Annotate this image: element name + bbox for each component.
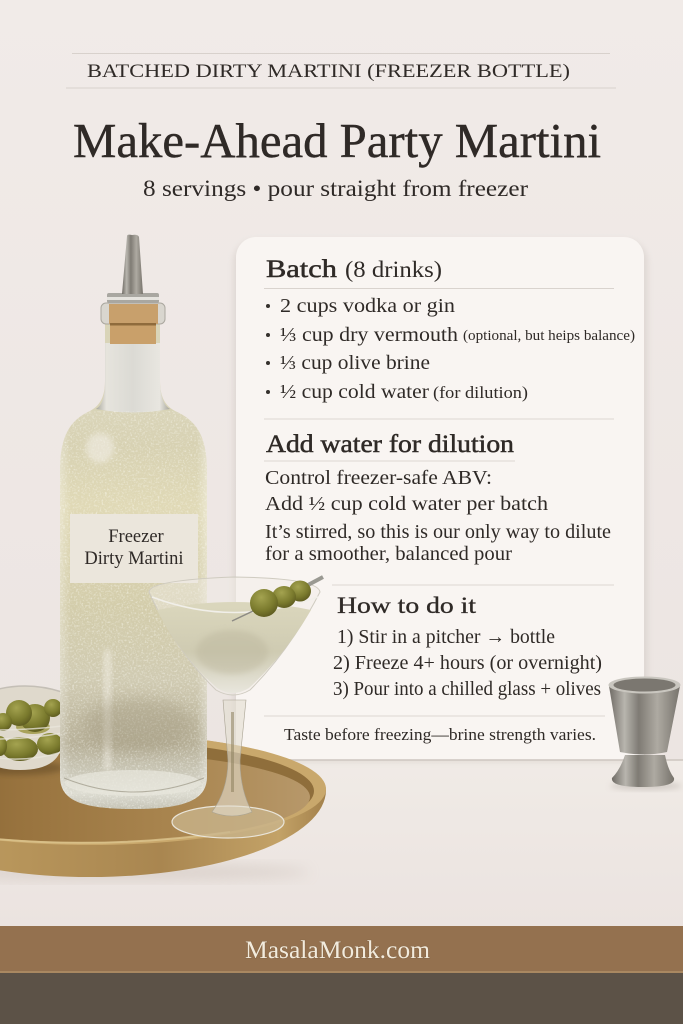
steps: 2) Freeze 4+ hours (or overnight) (333, 652, 602, 674)
footer band (0, 926, 683, 973)
batch heading: (8 drinks) (345, 257, 442, 282)
steps: 3) Pour into a chilled glass + olives (333, 678, 601, 700)
water body text: Control freezer-safe ABV: (265, 467, 492, 489)
frost highlights (60, 405, 207, 809)
water heading: Add water for dilution (266, 429, 514, 458)
how to heading: How to do it (337, 593, 477, 618)
wall-counter edge shadow (0, 759, 683, 761)
site name: MasalaMonk.com (245, 937, 431, 964)
water body text: Add ½ cup cold water per batch (265, 493, 548, 515)
batch heading (266, 254, 442, 283)
icon: steel jigger (608, 676, 682, 790)
steps (333, 626, 602, 700)
icon: freezer bottle (60, 235, 207, 809)
water body text: It’s stirred, so this is our only way to dilute (265, 521, 611, 543)
section: how to (333, 593, 602, 700)
icon: martini glass (149, 577, 323, 838)
steel pourer (107, 235, 159, 303)
ingredient list: 2 cups vodka or gin (280, 295, 455, 317)
ingredient list: ½ cup cold water (280, 381, 429, 403)
martini liquid (157, 602, 311, 693)
kicker text: BATCHED DIRTY MARTINI (FREEZER BOTTLE) (87, 61, 570, 82)
counter surface (0, 760, 683, 926)
bottle label (70, 514, 198, 583)
section: batch (264, 254, 635, 403)
cork and collar (101, 303, 165, 344)
ingredient list (266, 295, 635, 403)
bottle neck (96, 343, 170, 412)
icon: gold tray (0, 733, 326, 880)
ingredient list: ⅓ cup dry vermouth (280, 324, 458, 346)
panel: recipe card (233, 237, 648, 762)
background wall (0, 0, 683, 762)
steps: 1) Stir in a pitcher → bottle (337, 626, 555, 648)
bottom dark strip (0, 973, 683, 1024)
title: Make-Ahead Party Martini (73, 113, 601, 168)
tip note: Taste before freezing—brine strength varies. (284, 725, 596, 744)
glass bowl (149, 577, 320, 695)
ingredient list: (for dilution) (433, 383, 528, 402)
ingredient list: ⅓ cup olive brine (280, 352, 430, 374)
section: add water (264, 429, 611, 565)
water body text: for a smoother, balanced pour (265, 543, 512, 565)
glass stem (212, 700, 252, 816)
batch heading: Batch (266, 254, 337, 283)
glass foot (172, 806, 284, 838)
water body text (265, 467, 611, 565)
bottle label: Dirty Martini (84, 549, 184, 569)
olive pick and olives (232, 577, 323, 621)
bottle body (60, 322, 207, 809)
ingredient list: (optional, but heips balance) (463, 328, 635, 344)
subtitle: 8 servings • pour straight from freezer (143, 176, 528, 201)
bottle label: Freezer (108, 527, 164, 547)
icon: olive bowl (0, 686, 64, 775)
